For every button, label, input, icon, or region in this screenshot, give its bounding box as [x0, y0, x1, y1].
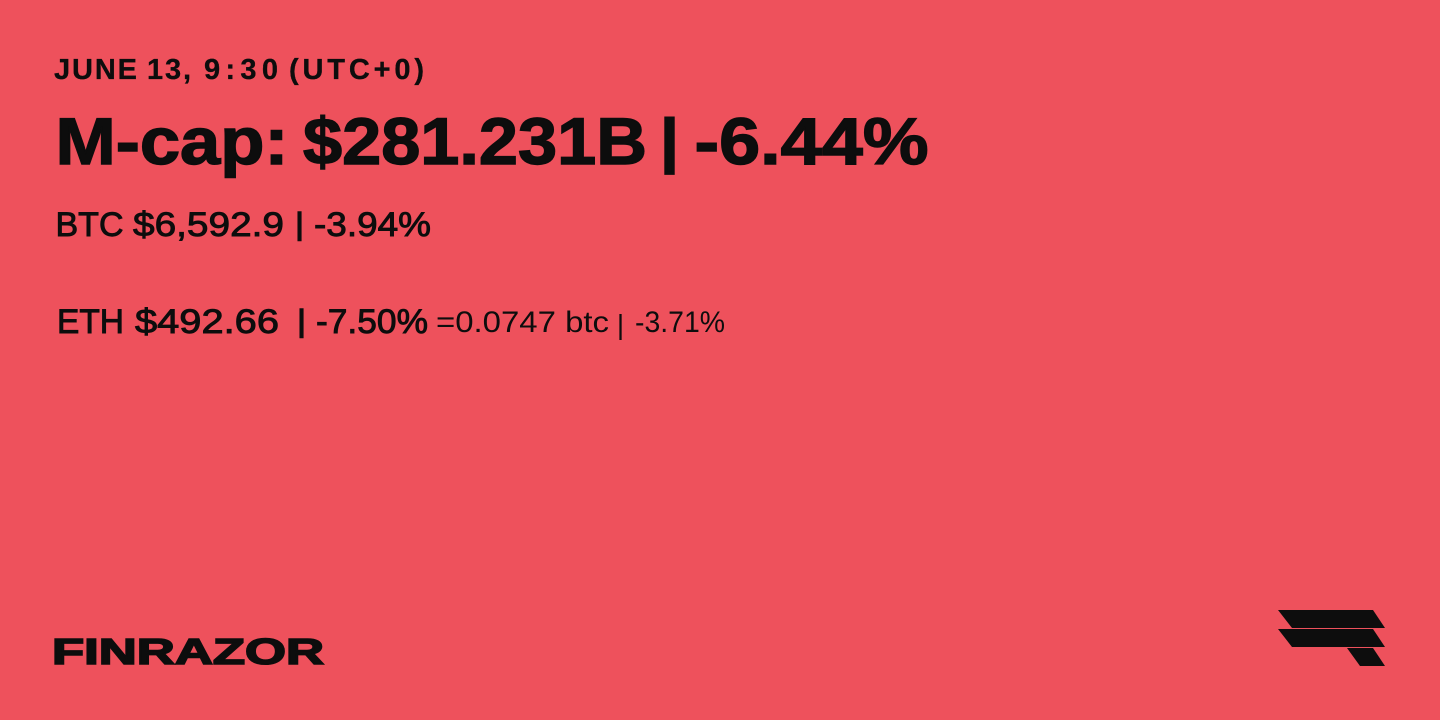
ETH price line — [57, 303, 428, 341]
ETH price line: | — [297, 303, 306, 338]
date heading: 13, — [147, 54, 191, 86]
ETH to BTC ratio — [436, 306, 725, 340]
ETH to BTC ratio: -3.71% — [635, 306, 725, 339]
ETH price line: ETH — [57, 303, 124, 341]
BTC price line: $6,592.9 — [133, 206, 284, 244]
logo icon — [1278, 610, 1385, 666]
ETH to BTC ratio: | — [617, 309, 624, 340]
BTC price line: | — [295, 206, 304, 241]
ETH price line: $492.66 — [135, 303, 279, 341]
logo wordmark: FINRAZOR — [52, 631, 324, 672]
date heading: (UTC+0) — [289, 54, 424, 86]
ETH price line: -7.50% — [316, 303, 428, 341]
BTC price line: -3.94% — [314, 206, 431, 244]
BTC price line — [56, 206, 431, 244]
title: total market cap: M-cap: — [56, 104, 288, 178]
title: total market cap: | — [661, 108, 678, 174]
date heading: 9:30 — [204, 54, 278, 86]
BTC price line: BTC — [56, 206, 124, 244]
title: total market cap: -6.44% — [694, 104, 928, 178]
title: total market cap: $281.231B — [303, 104, 647, 178]
title: total market cap — [56, 104, 928, 178]
ETH to BTC ratio: =0.0747 btc — [436, 306, 609, 339]
date heading — [54, 54, 424, 86]
date heading: JUNE — [54, 54, 137, 86]
